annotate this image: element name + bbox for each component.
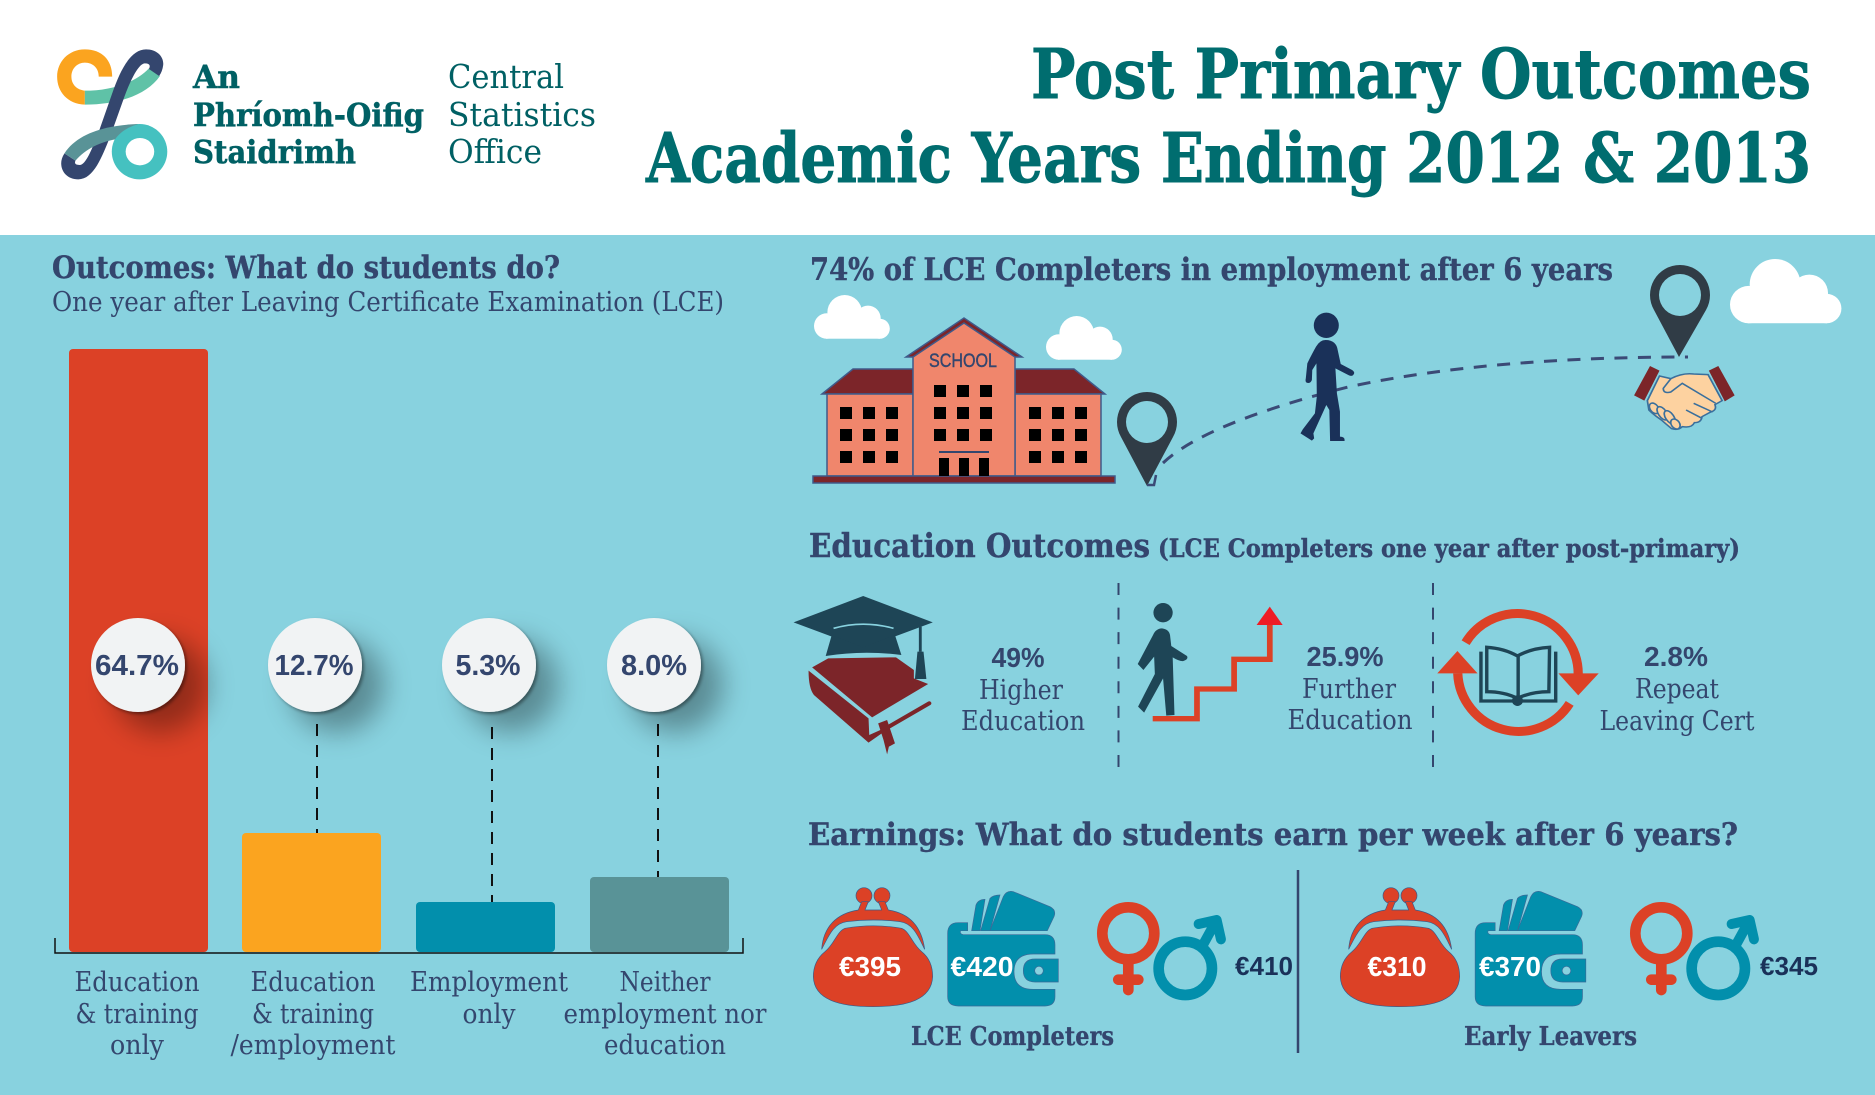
icon: purse [1340, 888, 1460, 1007]
stat: further education: 25.9% [1306, 641, 1384, 672]
icon: gender symbols [1635, 907, 1754, 995]
label: neither [564, 967, 767, 1061]
value bubble: 12.7%: 12.7% [274, 650, 354, 682]
value: 410: €410 [1235, 951, 1293, 981]
icon: graduation cap on book [794, 596, 933, 754]
value bubble: 5.3% [442, 618, 536, 712]
text: English office name: Central [448, 57, 564, 96]
text: Irish office name: Phríomh-Oifig [193, 96, 424, 134]
value: 310: €310 [1368, 951, 1426, 982]
label: education and training with employment: /employment [230, 1030, 396, 1061]
heading: outcomes: One year after Leaving Certificate Examination (LCE) [52, 287, 724, 318]
heading: employment: 74% of LCE Completers in employment after 6 years [810, 252, 1613, 288]
value bubble: 5.3%: 5.3% [456, 650, 521, 682]
stat: higher education: Higher [979, 675, 1063, 706]
stat: further education: Further [1302, 674, 1396, 705]
bar: neither [590, 877, 729, 952]
value bubble: 64.7%: 64.7% [95, 650, 179, 682]
heading: education outcomes: (LCE Completers one year after post-primary) [1158, 534, 1740, 563]
panel: page background [0, 235, 1875, 1095]
bar: education and training with employment [242, 833, 381, 952]
value bubble: 8.0% [607, 618, 701, 712]
icon: location pin start [1117, 392, 1177, 486]
label: neither: Neither [620, 967, 711, 998]
arrow: dashed career path [1163, 357, 1688, 463]
value: 345: €345 [1760, 951, 1818, 981]
icon: cloud middle [1046, 316, 1122, 360]
stat: higher education: 49% [992, 642, 1045, 673]
value: 420: €420 [950, 951, 1014, 982]
stat: repeat leaving cert: Repeat [1635, 674, 1719, 705]
label: education and training only: only [110, 1030, 165, 1061]
panel: white header [0, 0, 1875, 235]
label: education and training with employment: & training [252, 999, 374, 1030]
text: Irish office name: Staidrimh [193, 133, 356, 171]
stat: repeat leaving cert: Leaving Cert [1600, 706, 1755, 737]
label: education and training only [74, 967, 200, 1061]
text: Irish office name [192, 58, 424, 171]
stat: further education: Education [1288, 705, 1412, 736]
label: education and training only: & training [76, 999, 198, 1030]
label: employment only: Employment [410, 967, 568, 998]
panel: LCE completers earnings [813, 888, 1293, 1052]
value bubble: 12.7% [268, 618, 362, 712]
icon: CSO logo mark [57, 49, 167, 179]
icon: location pin end [1650, 265, 1710, 357]
icon: gender symbols [1102, 907, 1221, 995]
label: employment only: only [462, 999, 516, 1030]
icon: wallet [948, 891, 1058, 1006]
heading: education outcomes: Education Outcomes [809, 526, 1150, 565]
icon: person climbing stairs [1138, 603, 1283, 719]
value bubble: 64.7% [91, 618, 185, 712]
heading: education outcomes [809, 526, 1740, 565]
stat: higher education: Education [961, 706, 1085, 737]
text: English office name [448, 57, 596, 171]
stat: repeat leaving cert: 2.8% [1644, 641, 1708, 672]
icon: cloud left [814, 295, 890, 339]
label: employment only [410, 967, 568, 1030]
label: education and training only: Education [74, 967, 200, 998]
icon: wallet [1475, 891, 1586, 1006]
label: education and training with employment [230, 967, 396, 1061]
value bubble: 8.0%: 8.0% [621, 650, 687, 682]
icon: book with cycle arrows [1437, 614, 1599, 731]
icon: cloud right [1730, 259, 1841, 323]
label: neither: education [604, 1030, 726, 1061]
stat: further education [1288, 641, 1412, 736]
icon: school building: SCHOOL [929, 351, 997, 372]
panel: early leavers earnings [1340, 888, 1818, 1052]
value: 370: €370 [1479, 951, 1541, 982]
label: neither: employment nor [564, 999, 767, 1030]
icon: school building [813, 318, 1115, 483]
stat: higher education [961, 642, 1085, 737]
value: 395: €395 [839, 951, 901, 982]
icon: purse [813, 888, 933, 1007]
heading: earnings: Earnings: What do students earn per week after 6 years? [808, 817, 1738, 853]
text: Irish office name: An [192, 58, 240, 96]
label: early leavers: Early Leavers [1464, 1022, 1637, 1052]
icon: handshake [1634, 366, 1735, 430]
bar: education and training only [69, 349, 208, 952]
heading: outcomes: Outcomes: What do students do? [52, 250, 560, 286]
heading: outcomes [52, 250, 724, 318]
stat: repeat leaving cert [1600, 641, 1755, 737]
bar: employment only [416, 902, 555, 952]
label: education and training with employment: Education [250, 967, 376, 998]
text: English office name: Office [448, 132, 542, 171]
icon: walking person [1300, 313, 1354, 441]
bar chart: outcomes [55, 349, 767, 1061]
text: English office name: Statistics [448, 95, 596, 134]
title [645, 35, 1811, 199]
label: LCE completers: LCE Completers [911, 1022, 1114, 1052]
